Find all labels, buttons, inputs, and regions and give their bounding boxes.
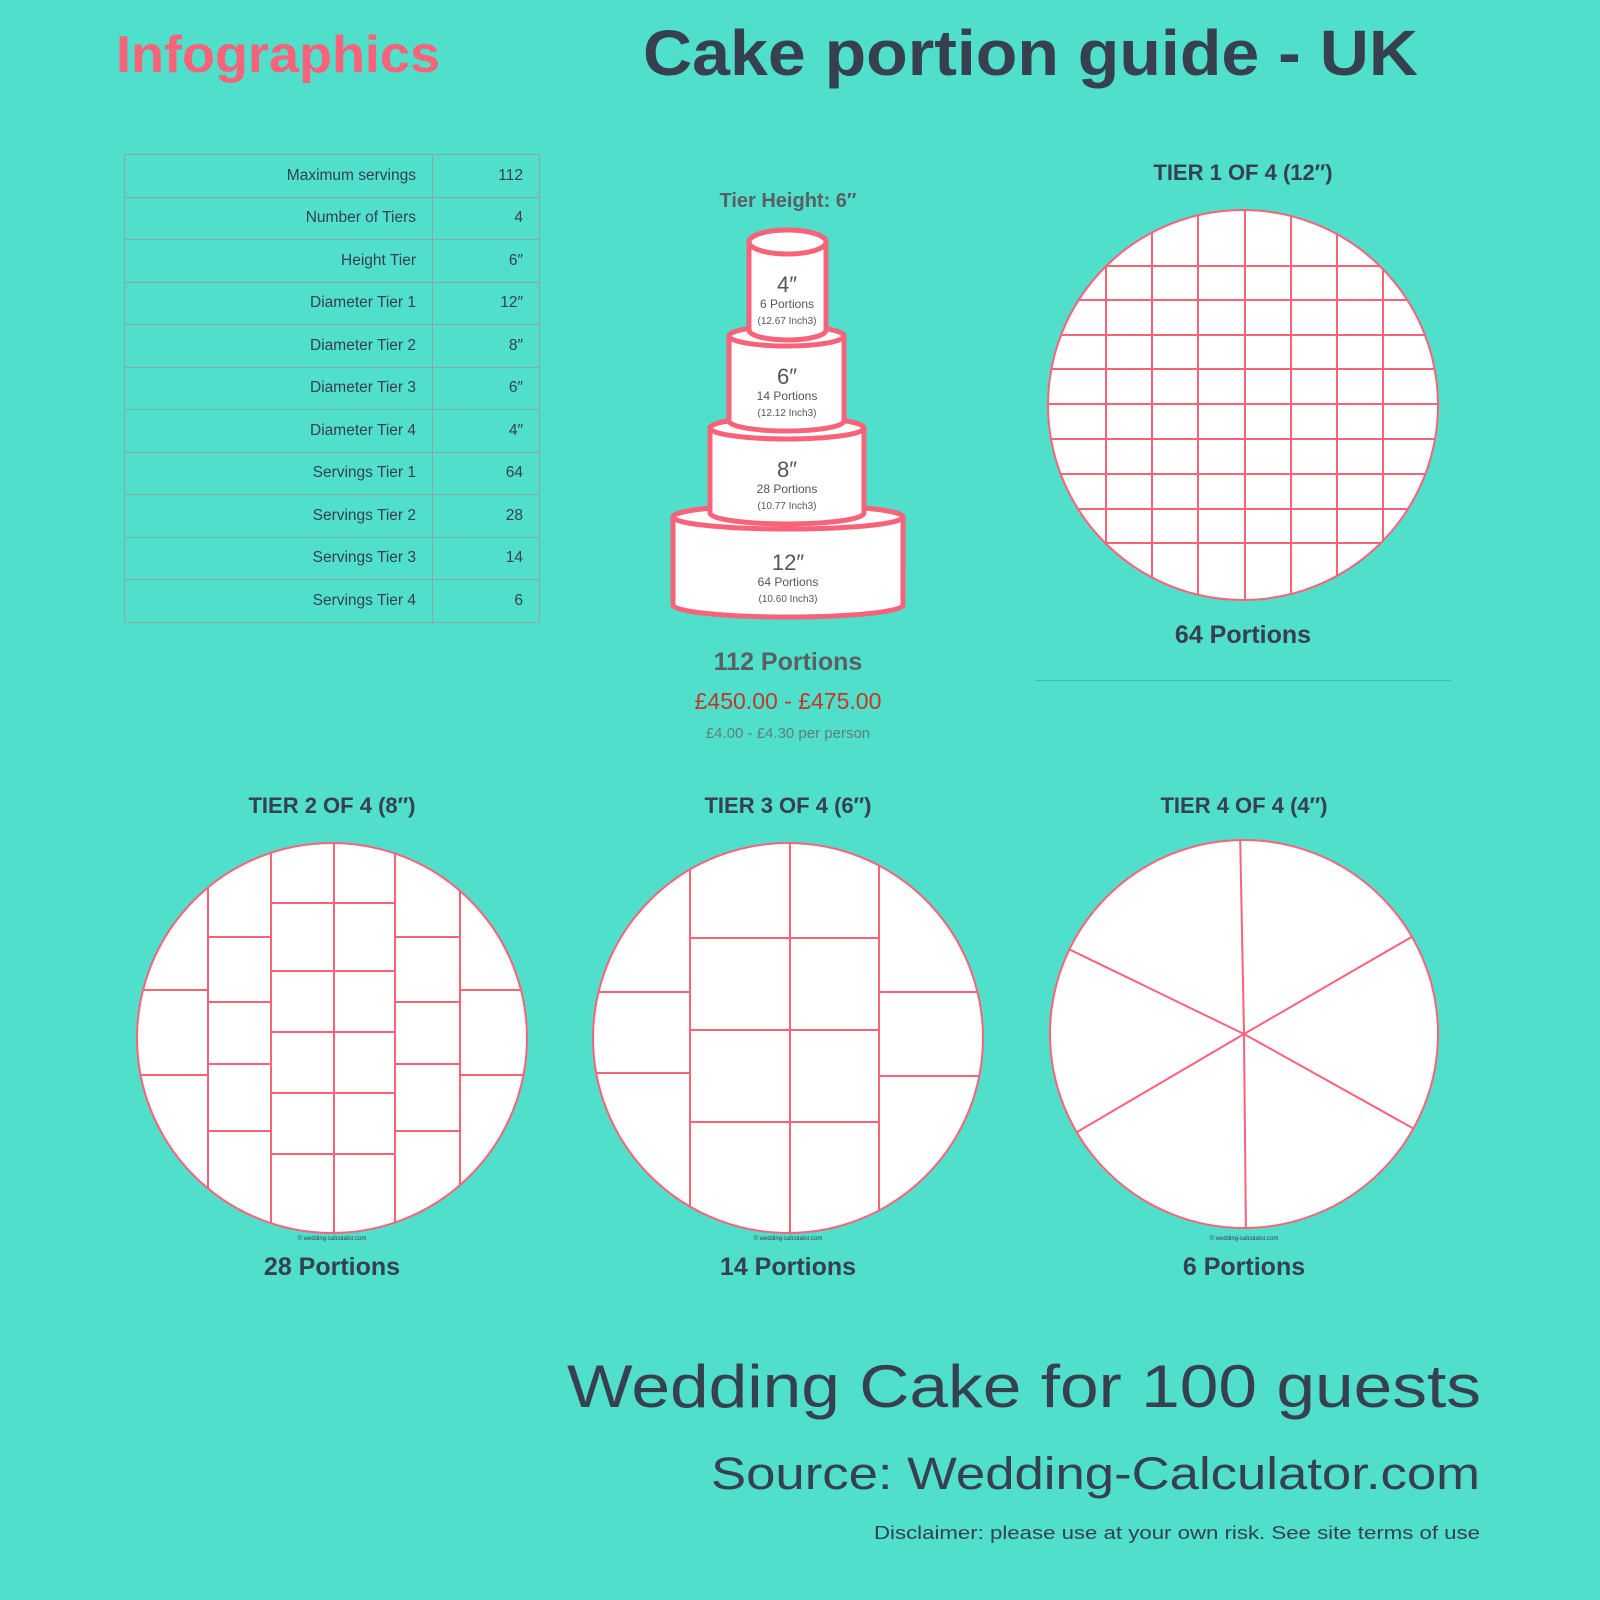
cake tier 8: (10.77 Inch3) — [758, 501, 816, 512]
table: cake details: 112 — [498, 167, 523, 184]
table: cake details: 14 — [506, 549, 523, 566]
table: cake details: Height Tier — [341, 252, 416, 269]
table: cake details: Number of Tiers — [306, 209, 416, 226]
table: cake details: 8″ — [509, 337, 523, 354]
table: cake details: Servings Tier 1 — [313, 464, 416, 481]
table: cake details: 28 — [506, 507, 523, 524]
table: cake details: 6 — [514, 592, 523, 609]
table: cake details: Maximum servings — [287, 167, 416, 184]
cake tier 6: 14 Portions — [757, 389, 817, 403]
footer heading: Wedding Cake for 100 guests — [567, 1353, 1481, 1420]
cake totals — [695, 648, 881, 742]
tier 3 diagram: 14 Portions — [720, 1253, 856, 1281]
tier 3 diagram: © wedding-calculator.com — [754, 1235, 822, 1242]
cake tier 6 — [729, 326, 844, 431]
cake tier 6: 6″ — [777, 364, 797, 389]
table: cake details: Servings Tier 3 — [313, 549, 416, 566]
tier 4 diagram: TIER 4 OF 4 (4″) — [1160, 793, 1328, 818]
cake totals: 112 Portions — [714, 648, 862, 676]
tier 4 diagram: 6 Portions — [1183, 1253, 1305, 1281]
cake tier 4: 4″ — [777, 272, 797, 297]
table: cake details — [124, 154, 540, 623]
cake tier 4 — [749, 230, 826, 340]
cake tier 12: (10.60 Inch3) — [759, 594, 817, 605]
table: cake details: 12″ — [500, 294, 523, 311]
cake illustration — [673, 190, 903, 617]
table: cake details: Servings Tier 4 — [313, 592, 416, 609]
title: infographics: Infographics — [116, 26, 440, 84]
cake tier 6: (12.12 Inch3) — [758, 408, 816, 419]
cake tier 8: 8″ — [777, 457, 797, 482]
cake tier 4: 6 Portions — [760, 297, 814, 311]
cake totals: £450.00 - £475.00 — [695, 688, 881, 714]
cake tier 12 — [673, 505, 903, 617]
table: cake details: 6″ — [509, 379, 523, 396]
cake tier 12: 64 Portions — [758, 575, 818, 589]
tier 4 diagram — [1050, 793, 1438, 1281]
table: cake details: Servings Tier 2 — [313, 507, 416, 524]
tier 2 diagram — [130, 793, 540, 1281]
title: cake portion guide: Cake portion guide - UK — [643, 17, 1418, 89]
cake totals: £4.00 - £4.30 per person — [706, 725, 870, 742]
tier 3 diagram — [585, 793, 995, 1281]
table: cake details: 64 — [506, 464, 523, 481]
cake tier 8 — [710, 417, 864, 524]
tier 2 diagram: TIER 2 OF 4 (8″) — [248, 793, 416, 818]
tier 1 diagram: 64 Portions — [1175, 621, 1311, 649]
table: cake details: Diameter Tier 1 — [310, 294, 416, 311]
tier 4 diagram: © wedding-calculator.com — [1210, 1235, 1278, 1242]
cake tier 12: 12″ — [772, 550, 804, 575]
cake tier 8: 28 Portions — [757, 482, 817, 496]
tier 1 diagram: TIER 1 OF 4 (12″) — [1153, 160, 1333, 185]
tier 3 diagram: TIER 3 OF 4 (6″) — [704, 793, 872, 818]
disclaimer: Disclaimer: please use at your own risk. See site terms of use — [874, 1523, 1480, 1543]
tier 2 diagram: © wedding-calculator.com — [298, 1235, 366, 1242]
cake illustration: Tier Height: 6″ — [719, 190, 857, 212]
tier 1 diagram — [1040, 160, 1450, 649]
tier 2 diagram: 28 Portions — [264, 1253, 400, 1281]
table: cake details: 4 — [514, 209, 523, 226]
cake tier 4: (12.67 Inch3) — [758, 316, 816, 327]
source text: Source: Wedding-Calculator.com — [711, 1448, 1480, 1499]
table: cake details: 6″ — [509, 252, 523, 269]
table: cake details: Diameter Tier 2 — [310, 337, 416, 354]
table: cake details: Diameter Tier 3 — [310, 379, 416, 396]
table: cake details: Diameter Tier 4 — [310, 422, 416, 439]
table: cake details: 4″ — [509, 422, 523, 439]
divider line — [1035, 680, 1451, 681]
